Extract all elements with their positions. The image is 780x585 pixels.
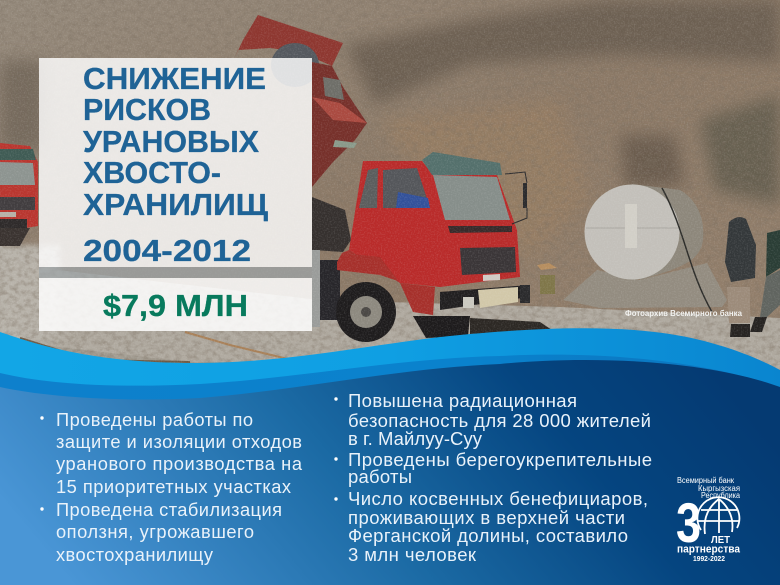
heading: СНИЖЕНИЕ: [83, 61, 266, 96]
bullet 1: безопасность для 28 000 жителей: [348, 410, 651, 431]
bullet 2: Проведены берегоукрепительные: [348, 449, 652, 470]
bullet 2: оползня, угрожавшего: [56, 521, 254, 542]
tank: [563, 184, 727, 312]
heading: РИСКОВ: [83, 92, 211, 127]
wave band: light blue: [0, 328, 780, 420]
small bucket: [540, 275, 555, 294]
bullet 2: [40, 499, 282, 565]
numeral 3: 3: [676, 491, 701, 554]
bullet 3: 3 млн человек: [348, 544, 477, 565]
title panel: [39, 58, 312, 331]
bullet list: right column: [334, 390, 652, 565]
bullet 1: в г. Майлуу-Суу: [348, 428, 483, 449]
wave band: mid blue: [0, 355, 780, 430]
logo: World Bank 30 years of partnership: Кыргызская: [698, 484, 740, 493]
bullet 1: уранового производства на: [56, 453, 303, 474]
logo: World Bank 30 years of partnership: Всемирный банк: [677, 476, 734, 485]
bullet 1: 15 приоритетных участках: [56, 476, 291, 497]
road: [0, 245, 780, 375]
logo: World Bank 30 years of partnership: 1992-2022: [693, 556, 725, 563]
bullet 2: работы: [348, 466, 412, 487]
logo: World Bank 30 years of partnership: ЛЕТ: [711, 534, 731, 546]
logo: World Bank 30 years of partnership: Республика: [701, 491, 740, 500]
photo: truck on a hillside in the rain: [0, 0, 780, 375]
bullet 3: [334, 488, 648, 565]
bullet 3: Ферганской долины, составило: [348, 525, 628, 546]
dump body: [235, 15, 367, 327]
bullet 1: [334, 390, 651, 449]
heading: ХРАНИЛИЩ: [83, 187, 268, 222]
bullet 1: Проведены работы по: [56, 409, 253, 430]
heading: ХВОСТО-: [83, 155, 221, 190]
hose on the road: [185, 332, 292, 360]
globe: [697, 497, 740, 534]
bullet 1: Повышена радиационная: [348, 390, 577, 411]
people: [725, 217, 780, 337]
logo: World Bank 30 years of partnership: партнерства: [677, 544, 741, 556]
photo credit: Фотоархив Всемирного банка: [625, 308, 742, 318]
heading: УРАНОВЫХ: [83, 124, 259, 159]
bullet 2: хвостохранилищу: [56, 544, 214, 565]
heading: [83, 61, 268, 222]
bullet 1: защите и изоляции отходов: [56, 431, 302, 452]
bullet 2: [334, 449, 652, 487]
bullet 2: Проведена стабилизация: [56, 499, 282, 520]
text background: [0, 360, 780, 585]
logo: World Bank 30 years of partnership: [676, 476, 741, 563]
red truck cab: [336, 152, 552, 342]
bullet 3: Число косвенных бенефициаров,: [348, 488, 648, 509]
bullet 1: [40, 409, 303, 497]
left truck: [0, 143, 38, 246]
years: 2004-2012: [83, 233, 251, 268]
budget: $7,9 МЛН: [103, 288, 248, 323]
bullet list: left column: [40, 409, 303, 565]
bullet 3: проживающих в верхней части: [348, 507, 625, 528]
